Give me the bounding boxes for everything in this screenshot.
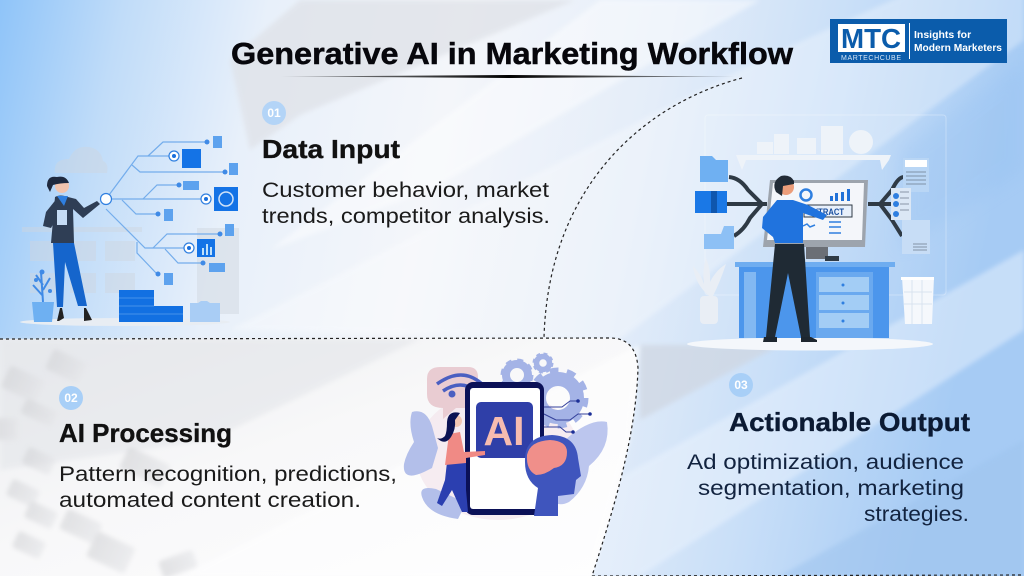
logo: MTC Martechcube: Insights for [914, 29, 971, 41]
monitor [763, 180, 868, 261]
woman [43, 177, 100, 321]
waste basket [901, 277, 934, 324]
logo: MTC Martechcube: Modern Marketers [914, 42, 1002, 54]
panel: data input text: trends, competitor analysis. [262, 204, 550, 228]
desk [735, 262, 895, 338]
logo: MTC Martechcube: MTC [841, 23, 901, 54]
panel: data input text: Data Input [262, 134, 400, 164]
man [762, 176, 827, 342]
black connector cables [727, 177, 904, 236]
logo: MTC Martechcube: MARTECHCUBE [841, 55, 901, 62]
phone [465, 382, 544, 515]
woman [437, 412, 485, 512]
title: Generative AI in Marketing Workflow [231, 36, 794, 71]
dashed divider: lower left section [0, 338, 1024, 576]
panel: AI processing text [59, 386, 397, 512]
badge 01: 01 [267, 106, 281, 120]
shelf [736, 126, 891, 170]
illustration: man at monitor extracting data [687, 115, 946, 350]
panel: actionable output text [687, 373, 970, 526]
monitor: EXTRACT [808, 207, 844, 218]
panel: AI processing text: AI Processing [59, 418, 232, 448]
badge 03: 03 [734, 378, 748, 392]
panel: actionable output text: strategies. [864, 502, 969, 526]
logo: MTC Martechcube [830, 19, 1007, 63]
badge 02 [59, 386, 83, 410]
server stacks [119, 290, 183, 322]
plant [693, 258, 726, 324]
panel: actionable output text: segmentation, marketing [698, 476, 964, 500]
left icons [695, 156, 734, 249]
folder [190, 301, 220, 322]
panel: data input text: Customer behavior, market [262, 178, 549, 202]
AI chip [476, 402, 533, 458]
plant pot [32, 270, 54, 322]
wifi bubble [427, 367, 482, 419]
circuit lines [544, 401, 590, 432]
panel: data input text [262, 101, 550, 228]
dashed divider: top curve [544, 78, 742, 338]
badge 01 [262, 101, 286, 125]
illustration: woman with data tree [20, 136, 239, 326]
AI chip: AI [484, 408, 524, 454]
badge 03 [729, 373, 753, 397]
panel: actionable output text: Actionable Output [729, 407, 970, 437]
data tree lines [106, 142, 225, 274]
panel: lower left section background [0, 338, 640, 576]
panel: AI processing text: Pattern recognition, predictions, [59, 462, 397, 486]
gears [502, 354, 586, 426]
panel: actionable output text: Ad optimization, audience [687, 450, 964, 474]
head with brain [525, 435, 581, 516]
panel: AI processing text: automated content creation. [59, 488, 361, 512]
right document icons [891, 158, 930, 254]
badge 02: 02 [64, 391, 78, 405]
illustration: AI phone with brain [404, 354, 608, 520]
